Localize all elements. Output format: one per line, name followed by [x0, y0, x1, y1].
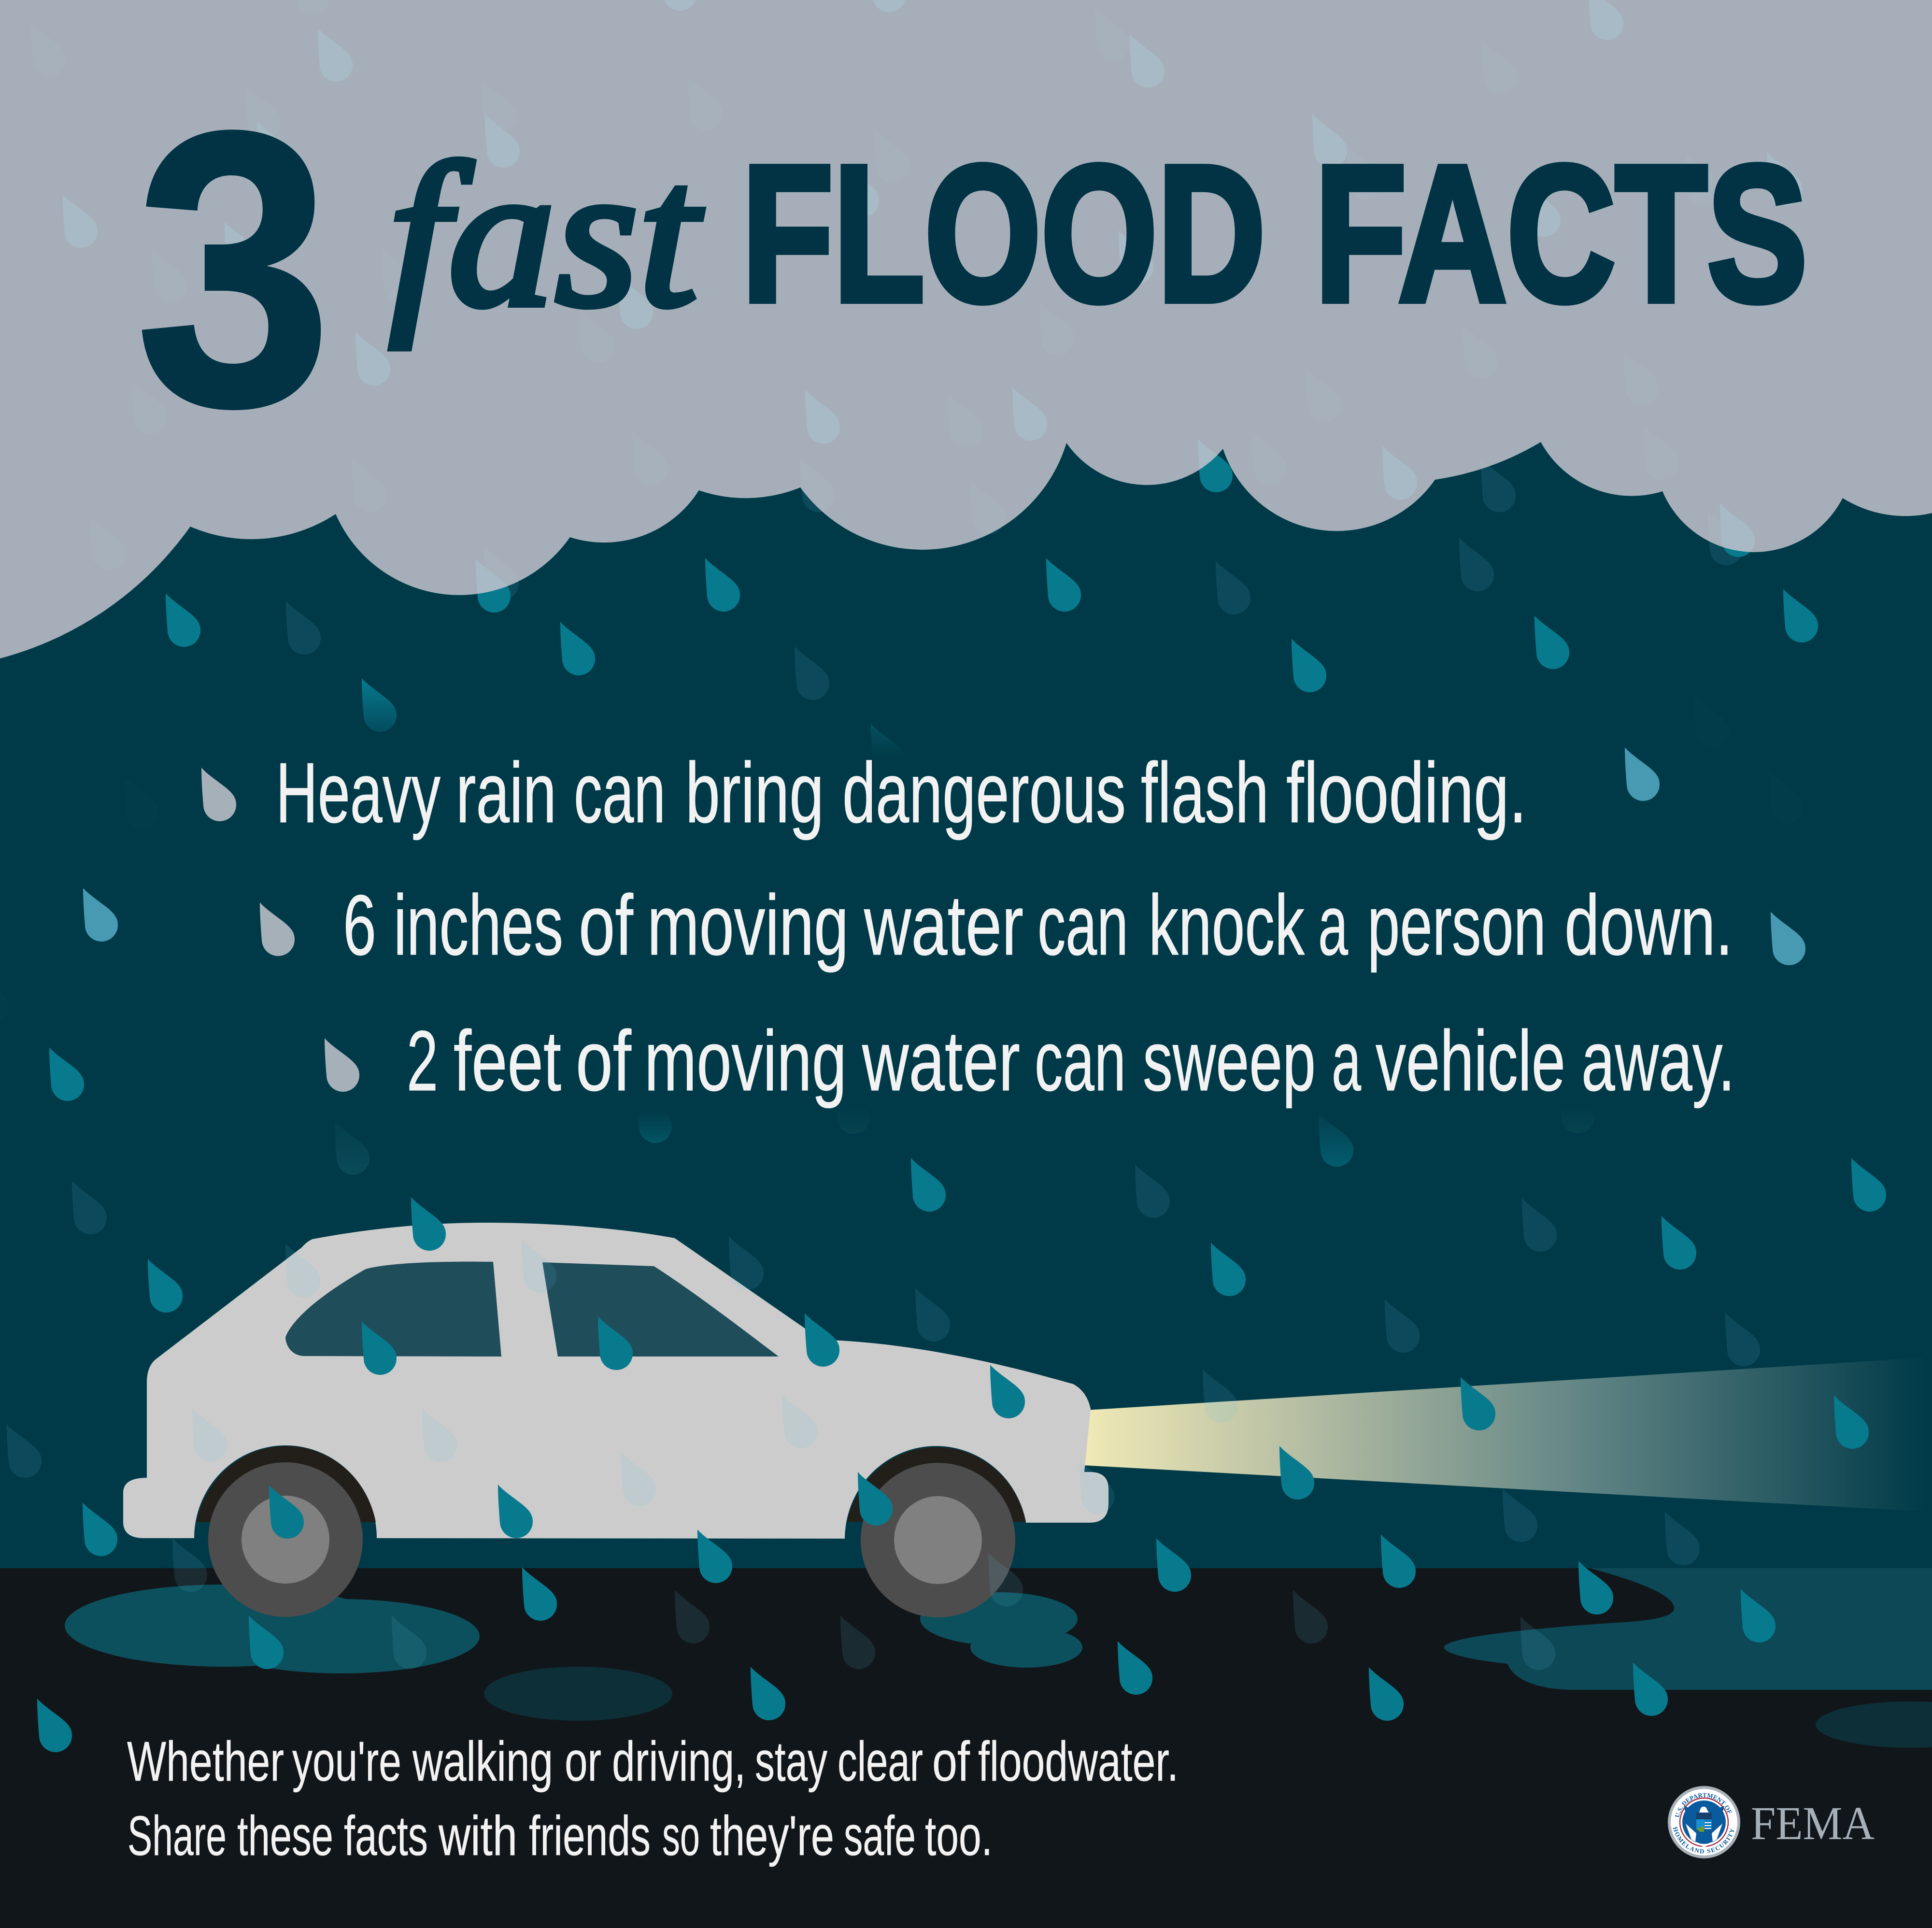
fact 2 text: person — [1367, 877, 1546, 973]
fact 3 text: 2 — [407, 1013, 438, 1109]
fact 1 bullet drop — [201, 768, 236, 821]
fact 2 text — [343, 877, 1733, 973]
fading rain drops at the edges of the text band — [335, 678, 1594, 1175]
title word FACTS: FACTS — [1315, 125, 1807, 342]
fact 3 text: a — [1332, 1013, 1361, 1109]
closing line 1: driving, — [612, 1730, 746, 1793]
closing line 2: facts — [344, 1804, 428, 1867]
closing line 1: of — [932, 1730, 970, 1793]
closing line 1: clear — [838, 1730, 923, 1793]
closing line 2: they're — [710, 1804, 834, 1867]
title word fast: fast — [389, 121, 705, 349]
fact 1 text: flooding. — [1286, 745, 1527, 841]
closing line 1: Whether — [127, 1730, 284, 1793]
closing message — [127, 1730, 1179, 1867]
car — [123, 1223, 1108, 1617]
fact 2 text: 6 — [343, 877, 376, 973]
front window — [542, 1262, 779, 1357]
fact 1 text: flash — [1141, 745, 1269, 841]
rear window — [285, 1262, 501, 1357]
closing line 2: safe — [844, 1804, 916, 1867]
fact 3 text: sweep — [1143, 1013, 1316, 1109]
headlight beam — [1082, 1357, 1927, 1512]
Department of Homeland Security seal: HOMELAND SECURITY — [1673, 1827, 1734, 1853]
closing line 1: stay — [755, 1730, 827, 1793]
fact 1 text: bring — [685, 745, 824, 841]
very faint rain drops behind the text — [0, 695, 1804, 1023]
fact 2 text: knock — [1149, 877, 1305, 973]
closing line 1: floodwater. — [978, 1730, 1179, 1793]
rear wheel arch — [197, 1446, 376, 1522]
puddles on the road — [65, 1568, 1932, 1748]
fact list — [201, 745, 1735, 1109]
fact 3 text: water — [862, 1013, 1020, 1109]
FEMA wordmark: FEMA — [1751, 1798, 1875, 1850]
front wheel — [861, 1463, 1015, 1617]
fact 1 text: dangerous — [842, 745, 1126, 841]
fact 1 text: can — [574, 745, 666, 841]
fact 3 text: away. — [1581, 1013, 1735, 1109]
fact 2 text: a — [1318, 877, 1348, 973]
closing line 2: so — [662, 1804, 700, 1867]
fact 2 bullet drop — [260, 902, 295, 956]
storm cloud — [0, 0, 1932, 658]
fact 2 text: moving — [647, 877, 849, 973]
closing line 1: you're — [292, 1730, 401, 1793]
title word FLOOD: FLOOD — [742, 125, 1265, 342]
front wheel arch — [847, 1447, 1026, 1522]
fact 3 text: vehicle — [1376, 1013, 1565, 1109]
fact 1 text: rain — [456, 745, 556, 841]
fact 2 text: inches — [394, 877, 563, 973]
closing line 2: Share — [128, 1804, 227, 1867]
Department of Homeland Security seal — [1668, 1786, 1740, 1858]
fact 3 text — [407, 1013, 1735, 1109]
fact 2 text: water — [864, 877, 1023, 973]
car body — [123, 1223, 1108, 1539]
fact 2 text: can — [1037, 877, 1128, 973]
faint rain drops inside the cloud — [31, 0, 1721, 570]
fact 3 text: feet — [454, 1013, 561, 1109]
fact 2 text: of — [579, 877, 634, 973]
Department of Homeland Security seal: U.S. DEPARTMENT OF — [1675, 1793, 1732, 1817]
closing line 1 — [127, 1730, 1179, 1793]
fact 2 text: down. — [1564, 877, 1733, 973]
fact 1 text: Heavy — [276, 745, 440, 841]
closing line 2: too. — [925, 1804, 993, 1867]
fact 3 bullet drop — [325, 1038, 359, 1092]
closing line 2: these — [237, 1804, 333, 1867]
light blue rain drops beside the facts — [83, 747, 1805, 965]
rear wheel — [208, 1462, 363, 1617]
closing line 2: with — [438, 1804, 517, 1867]
title number 3: 3 — [135, 50, 332, 487]
fact 3 text: moving — [644, 1013, 847, 1109]
title — [135, 50, 1807, 487]
fact 1 text — [276, 745, 1527, 841]
dark road — [0, 1568, 1932, 1928]
closing line 1: walking — [412, 1730, 553, 1793]
closing line 2 — [128, 1804, 993, 1867]
fact 3 text: can — [1035, 1013, 1126, 1109]
closing line 1: or — [565, 1730, 601, 1793]
closing line 2: friends — [529, 1804, 651, 1867]
fact 3 text: of — [576, 1013, 632, 1109]
faint rain drops — [7, 458, 1760, 1670]
